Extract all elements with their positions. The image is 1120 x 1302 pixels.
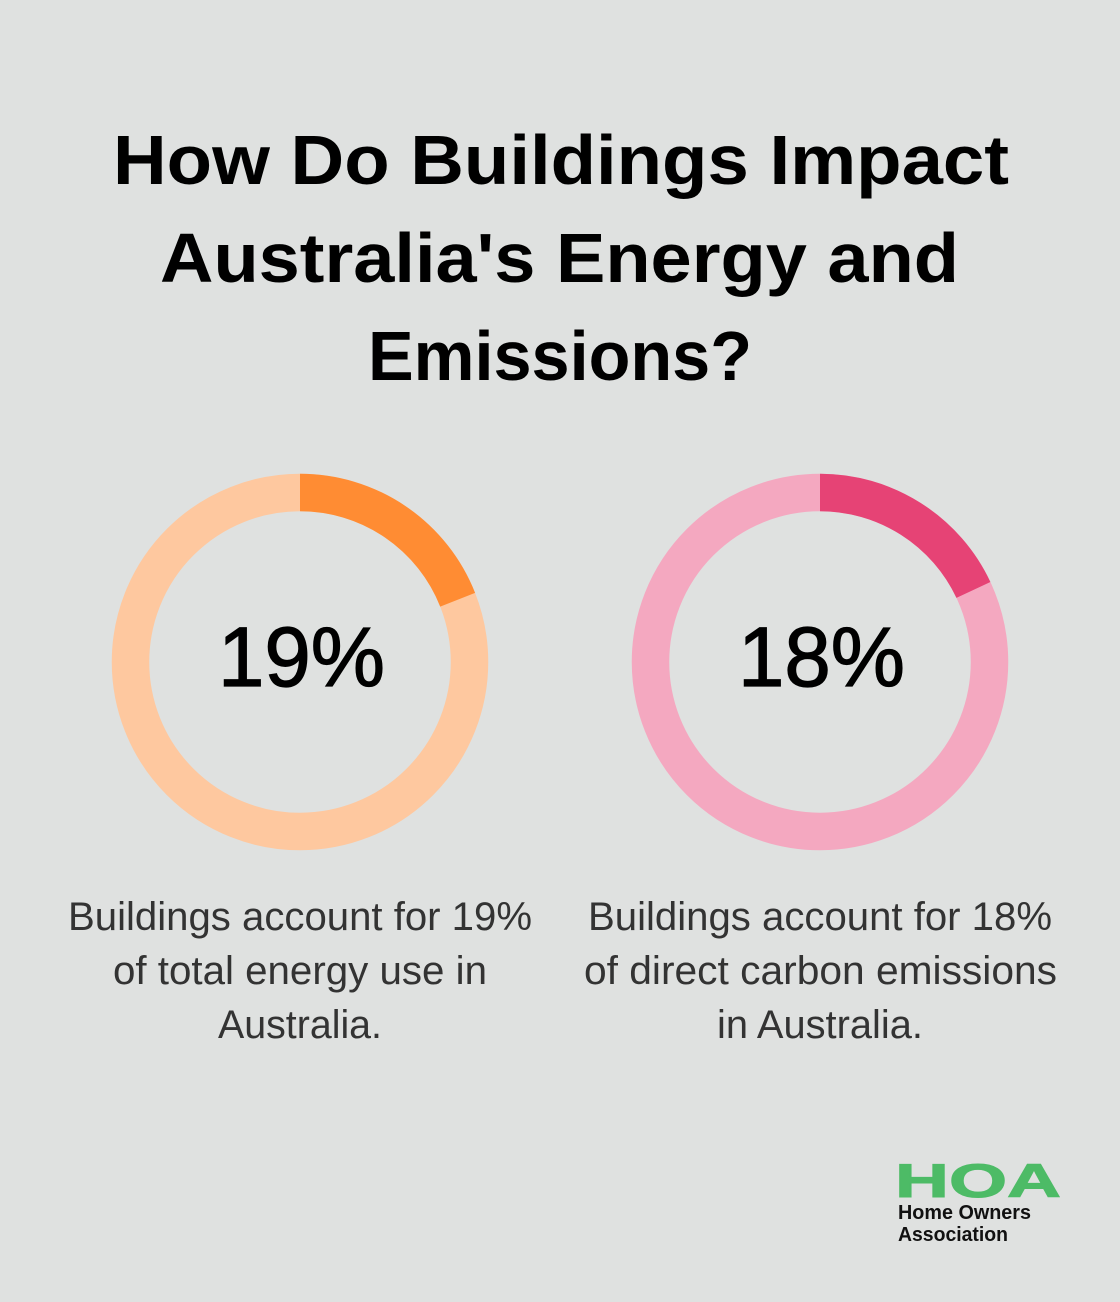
donut chart: 18% [650,492,990,832]
title [113,121,1009,395]
logo: HOA [895,1154,1061,1246]
description: carbon emissions: Buildings account for 18% [588,895,1052,939]
description: carbon emissions: in Australia. [717,1003,923,1047]
title: How Do Buildings Impact [113,121,1009,199]
description: energy use [68,895,532,1047]
description: carbon emissions: of direct carbon emissions [584,949,1057,993]
logo: HOA: Home Owners [898,1202,1031,1224]
title: Emissions? [368,317,752,395]
logo: HOA: HOA [895,1154,1061,1207]
value: 19%: 19% [218,610,385,704]
description: carbon emissions [584,895,1057,1047]
title: Australia's Energy and [160,219,959,297]
description: energy use: of total energy use in [113,949,487,993]
description: energy use: Australia. [218,1003,382,1047]
description: energy use: Buildings account for 19% [68,895,532,939]
donut chart: 19% [130,492,470,832]
value: 18%: 18% [738,610,905,704]
logo: HOA: Association [898,1224,1008,1246]
panel: energy use [68,492,532,1047]
panel: carbon emissions [584,492,1057,1047]
